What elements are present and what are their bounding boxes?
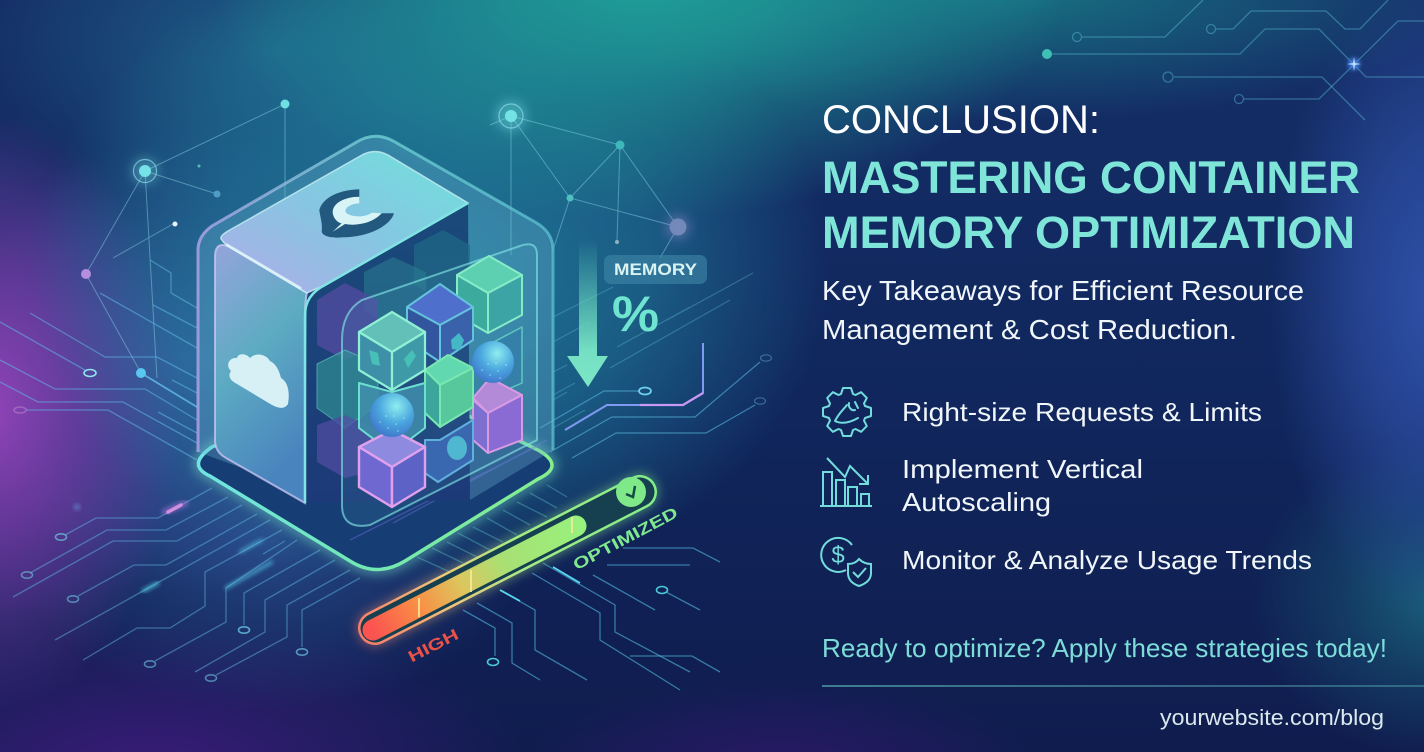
inner glass panel xyxy=(342,244,537,526)
takeaway: monitor usage: $ xyxy=(831,542,845,569)
network lines and nodes xyxy=(81,100,691,378)
title: MEMORY OPTIMIZATION xyxy=(822,207,1355,258)
lower circuit traces xyxy=(417,485,720,690)
title: CONCLUSION: xyxy=(822,98,1100,142)
outer glass shell xyxy=(198,136,553,500)
takeaway: monitor usage: Monitor & Analyze Usage Trends xyxy=(902,545,1312,575)
icon: dollar and shield xyxy=(821,538,871,586)
left face of box xyxy=(215,245,307,503)
left circuit traces xyxy=(0,260,360,675)
gauge label: high: HIGH xyxy=(406,627,462,666)
memory down arrow xyxy=(567,240,608,387)
cube: teal mid with sphere xyxy=(359,383,425,453)
cube: upper right green xyxy=(457,256,522,333)
takeaway: right-size: Right-size Requests & Limits xyxy=(902,397,1262,427)
container illustration xyxy=(198,136,553,570)
icon: gear xyxy=(823,388,871,436)
takeaway: vertical autoscaling xyxy=(820,454,1143,517)
takeaway: vertical autoscaling: Autoscaling xyxy=(902,487,1051,517)
sphere: right xyxy=(472,341,514,383)
right circuit traces xyxy=(540,273,772,458)
subtitle xyxy=(822,275,1304,345)
cube: front teal xyxy=(359,312,425,390)
icon: declining bars xyxy=(820,458,872,506)
subtitle: Management & Cost Reduction. xyxy=(822,314,1237,345)
icon: circuit start node xyxy=(1042,49,1052,59)
cube: right teal behind sphere xyxy=(488,327,522,398)
subtitle: Key Takeaways for Efficient Resource xyxy=(822,275,1304,306)
icon: C logo xyxy=(319,189,394,238)
takeaway: vertical autoscaling: Implement Vertical xyxy=(902,454,1143,484)
title: MASTERING CONTAINER xyxy=(822,152,1360,203)
percent sign: % xyxy=(612,286,659,342)
memory badge: MEMORY xyxy=(614,261,697,279)
cube: right purple xyxy=(473,378,522,453)
dark interior xyxy=(305,203,470,503)
memory usage gauge xyxy=(373,477,646,630)
icon: cloud xyxy=(228,354,289,408)
takeaway: monitor usage xyxy=(821,538,1312,586)
takeaway: right-size xyxy=(823,388,1262,436)
call to action: Ready to optimize? Apply these strategies today! xyxy=(822,633,1387,663)
back faded cubes xyxy=(317,230,470,478)
cube: green middle xyxy=(425,355,473,427)
top face of box xyxy=(221,152,468,293)
icon: sparkle xyxy=(1347,57,1361,71)
top right circuit decoration xyxy=(1047,0,1424,120)
cube: blue upper xyxy=(407,284,473,362)
glowing circuit highlights xyxy=(74,368,272,591)
platform xyxy=(198,375,552,570)
gauge label: optimized: OPTIMIZED xyxy=(571,505,681,574)
title xyxy=(822,98,1360,258)
cube: blue lower xyxy=(425,420,473,482)
faint under-panel lines xyxy=(350,440,547,540)
cube: purple bottom xyxy=(359,430,425,507)
icon: check badge xyxy=(616,477,646,507)
memory badge xyxy=(604,255,707,284)
icon: circuit rings left xyxy=(14,370,308,681)
sphere: left xyxy=(370,393,414,437)
website url: yourwebsite.com/blog xyxy=(1160,705,1384,730)
